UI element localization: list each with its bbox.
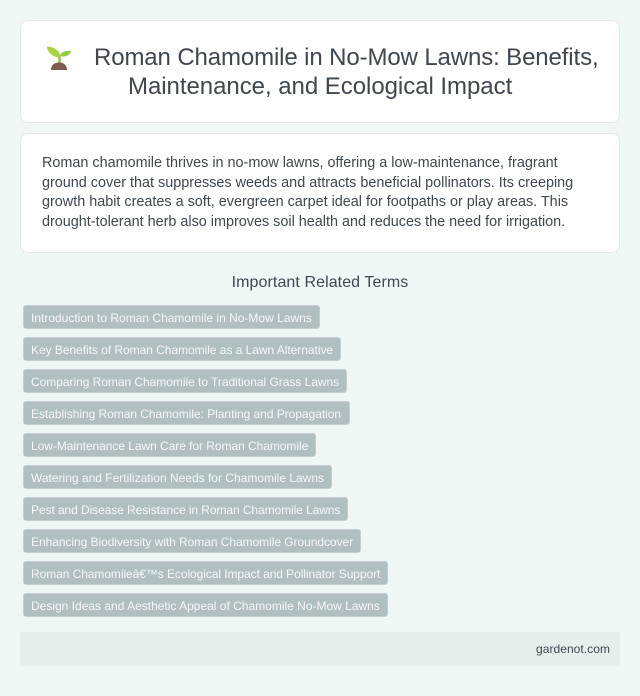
heading: related terms: Important Related Terms — [232, 274, 408, 291]
footer: source: gardenot.com — [536, 642, 610, 656]
tag list: Establishing Roman Chamomile: Planting and Propagation — [31, 407, 341, 421]
panel: summary text: drought-tolerant herb also improves soil health and reduces the need for irrigation. — [42, 214, 565, 230]
panel: summary text: ground cover that suppresses weeds and attracts beneficial pollinators. Its creeping — [42, 174, 573, 190]
tag list: Pest and Disease Resistance in Roman Chamomile Lawns — [31, 503, 340, 517]
panel: summary text: growth habit creates a soft, evergreen carpet ideal for footpaths or play areas. This — [42, 194, 568, 210]
tag list: Key Benefits of Roman Chamomile as a Lawn Alternative — [31, 343, 333, 357]
tag list: Watering and Fertilization Needs for Chamomile Lawns — [31, 471, 324, 485]
tag list: Design Ideas and Aesthetic Appeal of Chamomile No-Mow Lawns — [31, 599, 380, 613]
tag list: Comparing Roman Chamomile to Traditional Grass Lawns — [31, 375, 339, 389]
tag list: Roman Chamomileâ€™s Ecological Impact and Pollinator Support — [31, 567, 380, 581]
panel: summary text: Roman chamomile thrives in no-mow lawns, offering a low-maintenance, fragrant — [42, 155, 558, 171]
panel: summary text — [20, 133, 620, 253]
tag list — [23, 305, 388, 617]
title: Roman Chamomile in No-Mow Lawns: Benefits, — [94, 44, 598, 71]
icon: seedling — [47, 46, 71, 70]
tag list: Introduction to Roman Chamomile in No-Mow Lawns — [31, 311, 312, 325]
tag list: Low-Maintenance Lawn Care for Roman Chamomile — [31, 439, 308, 453]
title — [94, 44, 598, 100]
title: Maintenance, and Ecological Impact — [128, 73, 512, 100]
footer: source — [20, 632, 620, 666]
tag list: Enhancing Biodiversity with Roman Chamomile Groundcover — [31, 535, 353, 549]
panel: title card — [20, 20, 620, 123]
